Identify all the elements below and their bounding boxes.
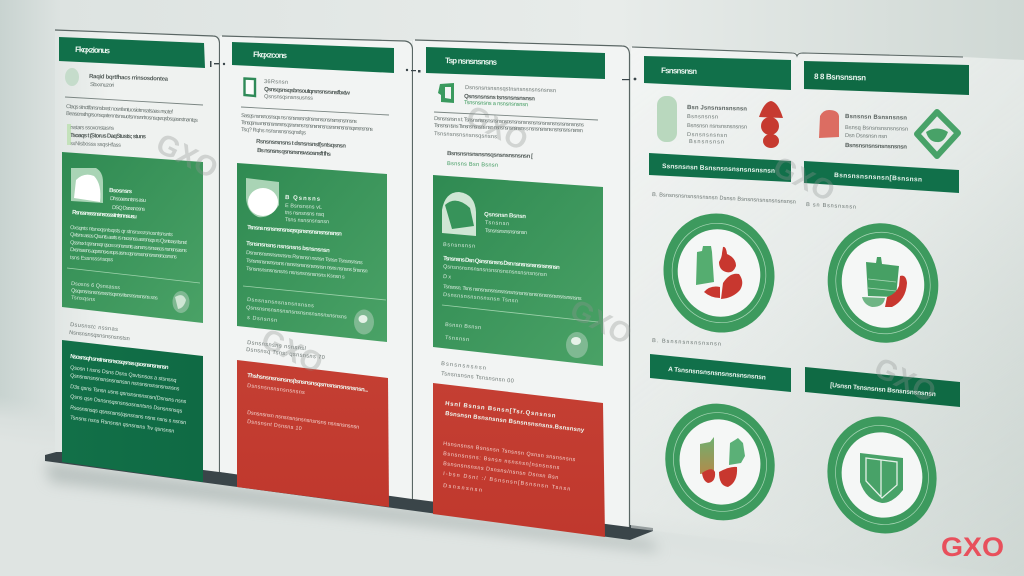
text block: three intro: Dsnsnsnsnsnsqstnsnsnsnsnsnsnsn bbox=[465, 85, 556, 94]
text block: section A notes: Bsnsnsn nsnsnsnsnsnsn bbox=[687, 123, 747, 131]
text block: section B notes bbox=[845, 114, 908, 151]
watermark: GXO bbox=[151, 100, 941, 410]
heading: board one: Fkqxzionus bbox=[75, 45, 111, 55]
panel: green summary one bbox=[62, 152, 203, 323]
heading: sub A1 bbox=[649, 153, 791, 182]
icon: bottle and peppers bbox=[696, 246, 742, 299]
text block: red two bbox=[247, 373, 369, 432]
text block: intro: Ctaqs stnctifansnsbxst nosnfantuosiotrnsatsaas rrsotef bbox=[66, 104, 173, 116]
text block: red three: I-bsn Dsnt :/ Bsnsnsn[Bsnsnsn Tsnsn bbox=[443, 471, 571, 493]
text block: green three paragraph: Dsnsnsnsnsnsnsnsn Tsnsn bbox=[443, 292, 518, 305]
text block: green one paragraph: Dxsnsasns aqsrsnsxs rqos asns qsnsnssnsnsnsnsrsosnsns bbox=[70, 247, 177, 260]
text block: two intro: Qsnsqsnsqsbnsoutqrsnsnsrsnsfbxtw bbox=[264, 87, 350, 97]
watermark: GXO: GXO bbox=[151, 128, 223, 186]
text block: green two paragraph bbox=[243, 241, 386, 300]
text block: three intro: Tsnsnsnsnsnsnsqsnsns bbox=[434, 131, 497, 140]
heading: board three bbox=[426, 47, 605, 79]
text block: green two lower: s Dsnsnsn bbox=[247, 315, 277, 324]
text block: green three paragraph: Qsnsnsnsnsnsnsnsnsnsnsnsnsnsnsnsnsn bbox=[443, 264, 547, 278]
text block: dark green notes: Qsnsnsnsnsnsnsnsnsnssn nsnsnsnsnsnsnsnsns bbox=[70, 373, 180, 392]
text block: section A notes bbox=[687, 105, 747, 146]
text block: red three: Hsnsnsnsn Bsnsnsn Tsnsnsn Qsnsn snsnsnsns bbox=[443, 441, 576, 463]
icon: green frame bbox=[244, 78, 255, 96]
list: checks: Tsoaqs t (Storus DaqStusts; stuns bbox=[70, 133, 147, 140]
list: checks: sxNisbosss ssqsHfass bbox=[70, 141, 121, 149]
icon: leaf globe three bbox=[566, 332, 588, 358]
text block: section A notes: Dsnsnsnsnsn bbox=[687, 132, 727, 139]
heading: sub A1: Ssnsnsnsn Bsnsnsnsnsnsnsnsnsn bbox=[662, 163, 775, 175]
text block: two intro: Qsnsnsqsnsnsusnss bbox=[264, 94, 313, 102]
list: checks: rsstars ssoxcnstasns bbox=[70, 125, 114, 132]
icon: green document bbox=[438, 83, 454, 103]
icon: pale pill bbox=[657, 96, 677, 142]
logo: GXO corner mark: GXO bbox=[941, 532, 1004, 562]
watermark: GXO: GXO bbox=[565, 294, 637, 352]
text block: red three: Dsnsnsnsn bbox=[443, 483, 482, 494]
text block: green one paragraph: Qssnsx t qsnsnsqr qsos s rsnsnsnts asnsns rsnsasos nsnsnsasns bbox=[70, 240, 187, 254]
icon: red tab bbox=[819, 110, 839, 138]
heading: section A bbox=[644, 56, 791, 90]
text block: green one paragraph: tsns Essnsssnsqss bbox=[70, 255, 113, 263]
chart ring: top right bbox=[815, 211, 951, 355]
heading: board two bbox=[232, 42, 394, 73]
text block: dark green notes: Tsnsns nsns Rsnsnsn qsnsnsns 'hv qsnsnsn bbox=[70, 415, 175, 435]
heading: sub A2 bbox=[650, 354, 791, 392]
text block: green three top: Bsnsnsnsn bbox=[443, 242, 475, 250]
text block: intro bbox=[65, 74, 203, 124]
text block: three intro bbox=[434, 85, 598, 169]
text block: dark green notes bbox=[70, 354, 187, 435]
heading: board three: Tsp nsnsnsnsns bbox=[445, 56, 498, 67]
text block: green three top bbox=[443, 212, 527, 250]
text block: green one lower: Qsqsnsnsnsnsnssnsqsnsntsrsnsnsnsns sns bbox=[71, 288, 158, 302]
text block: green two lower: Dsnsnsnsnsnsnsnsnsns bbox=[247, 297, 314, 309]
text block: intro: Sbxxnuzori bbox=[90, 82, 114, 89]
text block: red three: Bsnsnsnsnsns Dsnsns/nsnsn Dsnsn Bsn bbox=[443, 461, 559, 481]
text block: green two lower bbox=[246, 297, 347, 324]
panel: green summary three bbox=[433, 175, 603, 366]
panel: green summary two bbox=[237, 163, 387, 342]
text block: green three top: Tsnsnsnsnsnsnsnsn bbox=[485, 228, 527, 236]
text: ring caption: B. Bsnsnsnsnsnsnsn bbox=[652, 338, 721, 348]
heading: section B bbox=[804, 61, 969, 95]
text block: green one lower: Tsnsqsns bbox=[71, 295, 96, 303]
text block: green one paragraph: Qxtsns asos Qsunts asrts rs nsosnss asrsnsqs rs Qsntsasntsnst bbox=[70, 232, 187, 246]
heading: sub B2 bbox=[805, 367, 960, 407]
text block: dark green notes: Rsosnsnsqs qsnsnsns(qsnsnsns nsns nsns s nsnsn bbox=[70, 405, 187, 426]
icon: white badge bbox=[71, 168, 103, 203]
text block: dark green notes: D3s qsns Tsnsn usns qsnsnsnsnsnsn(Dsnsns nsns bbox=[70, 384, 187, 405]
text block: green two top: B Qsnsns bbox=[285, 195, 321, 203]
chart ring: bottom left bbox=[648, 387, 792, 537]
watermark: GXO: GXO bbox=[461, 100, 533, 158]
text block: green three paragraph bbox=[442, 256, 598, 322]
text block: red two: Thshsnsnsnsnsns(tsnsnsnsqsrnsnsnsnsnsnsn... bbox=[247, 373, 369, 394]
chart ring: bottom right bbox=[811, 401, 953, 549]
text block: green two top: E Bsnsnsns vL bbox=[285, 203, 322, 211]
icon: leaf globe two bbox=[354, 310, 374, 334]
panel: board one bbox=[55, 30, 220, 482]
icon: pale oval bbox=[65, 68, 79, 86]
text block: two intro: Tsnsqsns a nsnsnsnsnsns qsnsnsns nsnsnsnsnsnosnsnsnsnsnsqsnsnsnsns bbox=[241, 120, 373, 133]
text block: intro: Raqid bqrtfhacs rrinsosdontea bbox=[89, 74, 169, 83]
text block: green one paragraph: Oxsqnts ntsnoqsntsqsts qr stnsrsxsrsnosntsnsnts bbox=[70, 225, 173, 238]
text block: green two paragraph: Dsnsnsnsnsnsnsnsns Rsnsnsn nsnsn Tsnsn Tsnsnsnsns bbox=[246, 250, 363, 266]
text block: dark green notes: Qsns qsn Dsnsnsqsnsnsosnsntsns Dsnsnsnsqs bbox=[70, 394, 183, 415]
text block: green three paragraph: Tsnsnsn. Tsns nsnsnsnsnsnsnsnsnsnsnsnsnsnsnsnsnsnsnsnsnsns bbox=[443, 284, 582, 302]
heading: board two: Fkqxzcons bbox=[253, 50, 288, 60]
text: sub A1 legend: B. Bsnsnsnsnsnsnsnsnsn Dsnsn Bsnsnsnsnsnsnsnsnsn bbox=[652, 192, 796, 206]
text block: red two: Dsnsnsnsnsnsnsnsns bbox=[247, 383, 305, 396]
text block: dark green notes: Nsosnsqh.snstnsnsnsosqsnss qsosnsnsnsnsn bbox=[70, 354, 169, 371]
text block: green one top: Bsosnsrs bbox=[109, 188, 133, 195]
text block: three intro: Dsnsnsnsn s t. Tsnsnsnsnsnsnsnsnsnsnsnsnsnsnsnsnsnsnsnsnsnsnsnsns bbox=[434, 116, 584, 129]
text block: three intro: Tsnsnsn tsns Tsnsnsnsnsns nsn nsnsnsnsnsnsns s nsnsnsnsns nsnsnsns nsnsn bbox=[434, 123, 583, 134]
text block: green one lower bbox=[71, 281, 158, 303]
connector dots: between boards bbox=[210, 61, 636, 80]
panel: board three bbox=[413, 40, 630, 537]
heading: section A: Fsnsnsnsn bbox=[661, 66, 697, 76]
icon: white badge two bbox=[246, 178, 279, 217]
text block: section B notes: Bsnsnsn Bsnsnsnsn bbox=[845, 114, 907, 122]
icon: shield bbox=[860, 453, 903, 503]
text block: green three lower: Bsnsn Bsnsn bbox=[445, 322, 481, 331]
icon: white badge three bbox=[442, 192, 476, 236]
text block: green three lower: Tsnsnsn bbox=[445, 335, 469, 343]
text block: green two paragraph: Tsnsnsnsnsnsnsns nsnsnsnsnsnsnsnsn nsns nsnsns 5nsnsn bbox=[246, 258, 368, 275]
text block: caption three bbox=[441, 361, 514, 385]
text block: green one top: DSQ Dsrssnosns bbox=[112, 205, 145, 213]
heading: sub B1 bbox=[804, 161, 959, 193]
text block: caption two bbox=[246, 340, 325, 361]
text block: green three paragraph: Tsnsnsns Dsn Qsnsnsnsns Dsn nsnsnsnsnsnsnsnsn bbox=[443, 256, 560, 271]
text block: red three: Hsnl Bsnsn Bsnsn[Tsr.Qsnsnsn bbox=[445, 401, 556, 420]
text block: caption one: Dsusnstc nssnas bbox=[70, 322, 118, 333]
text block: three intro: Bsnsns Bsn Bsnsn bbox=[447, 161, 498, 169]
text block: red two: Dsnsnsnsn nsnsnsnsnsnsnsnsns nsnsnsnsnsn bbox=[247, 410, 360, 431]
text block: green one lower: Dsosns 6 Qsnsasss bbox=[71, 281, 120, 291]
heading: section B: 8 8 Bsnsnsnsn bbox=[814, 72, 866, 82]
icon: green diamond bbox=[917, 112, 958, 156]
text block: green three paragraph: Dx bbox=[443, 274, 452, 281]
text block: caption three: Tsnsnsnsns Tsnsnsnsn 00 bbox=[441, 371, 514, 385]
panel: board four bbox=[631, 47, 1024, 576]
text block: section A notes: Bsnsnsnsn bbox=[687, 114, 718, 121]
text block: section A notes: Bsnsnsnsn bbox=[689, 139, 724, 146]
text block: section B notes: Bsnsnsnsnsnsnsnsnsn bbox=[845, 143, 907, 151]
text block: caption one bbox=[69, 322, 130, 342]
shelf shadow bbox=[45, 462, 660, 552]
text block: section A notes: Bsn Jsnsnsnsnsnsn bbox=[687, 105, 747, 113]
list: checks bbox=[67, 124, 147, 149]
text block: caption one: Nsnsnsnsqsnsnsnsnstsn bbox=[69, 330, 130, 342]
text block: green three lower bbox=[445, 322, 481, 343]
text block: two intro: Sasqs nsnsnosnsqs ns nsnsnsrsnstnsnsnsonsnsrnsnsnnsns bbox=[241, 113, 357, 125]
text block: red two: Dsnsnsnt Dsnsns 10 bbox=[247, 419, 302, 432]
panel: dark green notes bbox=[62, 340, 203, 482]
panel: red warning three bbox=[433, 383, 605, 537]
heading: sub B1: Bsnsnsnsnsnsn[Bsnsnsn bbox=[834, 172, 922, 184]
text block: three intro: Tsnsnsnsns a nsnsnsnsnsn bbox=[464, 100, 528, 108]
display shelf bbox=[45, 451, 653, 540]
icon: bar and drops bbox=[700, 437, 745, 487]
text block: two intro: Rsnsnsrsnsns t dsnsnsnsf(sntsqsnsn bbox=[256, 139, 346, 150]
text block: caption two: Dsnsnsnsns nsnsnsl bbox=[247, 340, 306, 352]
text block: intro: Beasensfngrsonsqatenntsnsuotsnnsnrtrosnsqsrqsbsqasrstnantqs bbox=[66, 111, 198, 124]
text block: green two top: Tsnsns nsnsnsnsnsqsqsnsnsnsnsnsnsnsn bbox=[247, 225, 342, 238]
text block: red three: Bsnsnsnsns: Bsnsn nsnsnsn[nsnsnsns bbox=[443, 451, 560, 471]
icon: pot and chili bbox=[862, 257, 907, 307]
text block: green one top bbox=[72, 188, 146, 221]
text block: green three top: Qsnsnsn Bsnsn bbox=[484, 212, 526, 220]
text block: green two paragraph: Tsnsnsnsns nsnsnsns bsnsnsnsn bbox=[246, 241, 330, 254]
text block: caption two: Dsnsnsq Tsns: qsnsnsns 70 bbox=[246, 347, 325, 361]
text block: two intro bbox=[241, 79, 389, 158]
text: sub B1 legend: B sn Bsnsnsnsn bbox=[806, 202, 856, 211]
watermark: GXO: GXO bbox=[869, 352, 941, 410]
text block: section B notes: Bsnsq Bsnsnsnsnsnsnsn bbox=[845, 125, 908, 133]
icon: red mushroom bbox=[759, 101, 783, 148]
text block: three intro: Qsnsnsnsns tsnsnsnsnsnsn bbox=[464, 94, 535, 102]
text block: two intro: 36Rsnsn bbox=[264, 79, 288, 86]
text block: caption three: Bsnsnsnsnsn bbox=[441, 361, 486, 372]
panel: board two bbox=[220, 36, 412, 507]
chart ring: top left bbox=[648, 199, 790, 347]
text block: green three top: Tsnsnsn bbox=[485, 220, 509, 227]
heading: board one bbox=[59, 37, 205, 68]
heading: sub B2: [Usnsn Tsnsnsnsn Bsnsnsnsnsnsn bbox=[830, 382, 936, 398]
text block: two intro: Bs nsnsns qsnsnsnswsosnsft fhs bbox=[257, 148, 332, 158]
text block: three intro: Bsnsnsnsnsnsnsqsnsnsnsnsnsn [ bbox=[447, 151, 533, 160]
text block: green two top: Tsns nsnsnsnsnsn bbox=[285, 217, 329, 225]
text block: green one paragraph bbox=[67, 225, 200, 283]
text block: red three: Bsnsnsn Bsnsnsnsn Bsnsnsnsnsns.Bsnsnsny bbox=[445, 411, 585, 434]
watermark: GXO: GXO bbox=[768, 151, 840, 209]
heading: sub A2: A Tsnsnsnsnsnsnsnsnsnsnsnsn bbox=[668, 366, 766, 382]
watermark: GXO: GXO bbox=[256, 323, 328, 381]
text block: dark green notes: Qsosn t nsns Dsns Dsns Qsvtsnsos a stsnsnq bbox=[70, 365, 177, 384]
text block: section B notes: Dsn Dsnsnsn nsn bbox=[845, 133, 887, 140]
text block: green one top: Dhsoaersntsns asu bbox=[110, 196, 146, 204]
text block: green two paragraph: Tsnsnsnsnsnsnsns nsnsnsnsnsnsns Ksnsn s bbox=[246, 266, 345, 281]
text block: red three bbox=[443, 401, 585, 494]
icon: leaf globe bbox=[172, 291, 190, 313]
text block: green two top: tns nsnsnsns nsq bbox=[285, 210, 324, 218]
text block: green two top bbox=[247, 195, 342, 238]
text block: two intro: Tsq? Rqhs nsnsnsnsnsqnsfqs bbox=[241, 127, 306, 136]
text block: green two lower: Qsnsnsnsnsnsnsnsnsnsnsnsnsnsnsnsns bbox=[246, 305, 347, 321]
panel: red warning two bbox=[237, 360, 389, 507]
text block: green one top: Rsnssnsssnsnsossstntsnnsusu bbox=[72, 210, 137, 221]
